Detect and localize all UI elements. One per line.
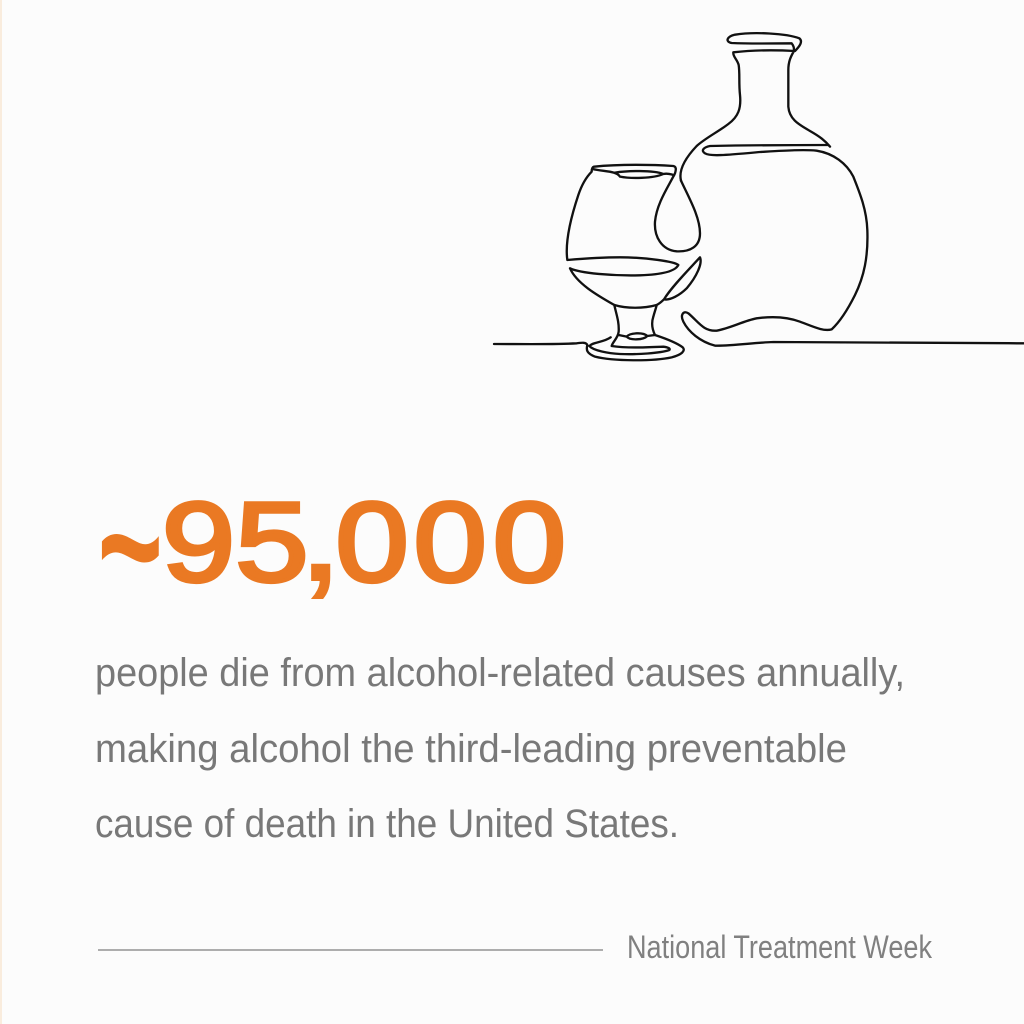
footer rule: [98, 949, 603, 951]
body text: [95, 651, 905, 846]
icon: brandy glass line drawing: [494, 165, 701, 360]
body text: people die from alcohol-related causes annually,: [95, 651, 905, 695]
footer source label: National Treatment Week: [627, 929, 933, 965]
big statistic: ~: [98, 445, 163, 646]
body text: making alcohol the third-leading preventable: [95, 727, 847, 771]
big statistic: 95,000: [162, 476, 566, 606]
body text: cause of death in the United States.: [95, 802, 679, 846]
icon: bottle line drawing: [680, 33, 1024, 346]
big statistic: [98, 445, 566, 646]
